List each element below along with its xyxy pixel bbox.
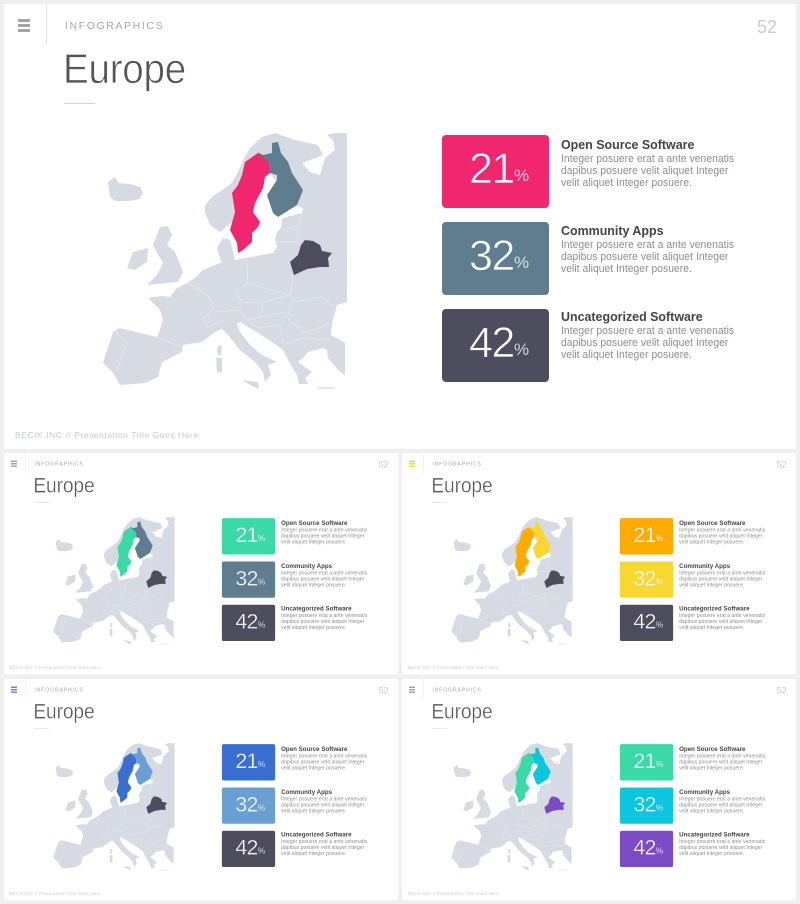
map of Europe — [53, 743, 175, 870]
stat box: 42%: 42 — [633, 836, 656, 860]
text: uncategorized software: velit aliquet Integer posuere. — [281, 625, 346, 631]
text: open source software — [679, 519, 765, 545]
text: community apps: Integer posuere erat a ante venenatis — [679, 570, 765, 576]
text: community apps: dapibus posuere velit aliquet Integer — [561, 251, 728, 263]
text: open source software: dapibus posuere velit aliquet Integer — [679, 533, 762, 539]
text: uncategorized software: Integer posuere erat a ante venenatis — [679, 613, 765, 619]
text: community apps — [281, 788, 367, 814]
stat box: 32% — [620, 787, 673, 824]
stat box: 32%: 32 — [235, 792, 258, 816]
stat box: 32%: 32 — [633, 792, 656, 816]
panel: blue variant: 52 — [379, 685, 389, 695]
text: community apps: Integer posuere erat a ante venenatis — [281, 796, 367, 802]
map of Europe — [451, 743, 573, 870]
text: open source software: Open Source Software — [281, 745, 347, 753]
stat box: 32%: % — [258, 577, 265, 586]
map of Europe — [53, 517, 175, 644]
text: open source software: Integer posuere erat a ante venenatis — [281, 527, 367, 533]
text: uncategorized software — [679, 605, 765, 631]
text: uncategorized software: Uncategorized Software — [679, 605, 750, 612]
stat box: 32% — [442, 222, 549, 295]
panel: green variant — [4, 453, 398, 674]
stat box: 32% — [620, 561, 673, 598]
text: open source software: Integer posuere erat a ante venenatis — [679, 527, 765, 533]
stat box: 42%: % — [258, 620, 265, 630]
stat box: 32%: 32 — [633, 566, 656, 590]
stat box: 32% — [222, 787, 275, 824]
map of Europe — [103, 133, 347, 389]
stat box: 21% — [620, 744, 673, 780]
stat box: 32%: % — [656, 803, 663, 812]
text: open source software: dapibus posuere velit aliquet Integer — [281, 533, 364, 539]
stat box: 42% — [442, 309, 549, 382]
text: community apps: Integer posuere erat a ante venenatis — [561, 239, 734, 251]
text: open source software: dapibus posuere velit aliquet Integer — [281, 759, 364, 765]
text: open source software: velit aliquet Integer posuere. — [679, 765, 744, 771]
stat box: 42%: 42 — [469, 319, 514, 367]
text: open source software: dapibus posuere velit aliquet Integer — [679, 759, 762, 765]
panel: green, cyan and purple variant: INFOGRAPHICS — [432, 687, 482, 693]
text: open source software — [561, 137, 734, 189]
icon: menu — [409, 460, 415, 467]
title: Europe — [431, 699, 493, 723]
stat box: 42%: % — [258, 846, 265, 856]
panel: green variant: 52 — [379, 459, 389, 469]
stat box: 42% — [620, 605, 673, 641]
text: community apps: velit aliquet Integer posuere. — [281, 582, 346, 588]
text: community apps: dapibus posuere velit aliquet Integer — [281, 802, 364, 808]
text: community apps — [281, 562, 367, 588]
stat box: 42% — [222, 831, 275, 867]
title: Europe — [33, 473, 95, 497]
footer: BECIK.INC // Presentation Title Goes Here — [9, 665, 101, 670]
text: uncategorized software: dapibus posuere velit aliquet Integer — [679, 619, 762, 625]
text: community apps — [679, 562, 765, 588]
text: open source software: velit aliquet Integer posuere. — [679, 539, 744, 545]
stat box: 32%: % — [258, 803, 265, 812]
text: uncategorized software: Uncategorized Software — [281, 605, 352, 612]
stat box: 32%: 32 — [235, 566, 258, 590]
stat box: 32%: 32 — [469, 232, 514, 280]
text: community apps: dapibus posuere velit aliquet Integer — [679, 576, 762, 582]
text: uncategorized software: velit aliquet Integer posuere. — [281, 851, 346, 857]
text: open source software: Integer posuere erat a ante venenatis — [281, 753, 367, 759]
text: community apps: velit aliquet Integer posuere. — [679, 808, 744, 814]
text: uncategorized software — [679, 831, 765, 857]
stat box: 42% — [620, 831, 673, 867]
stat box: 32% — [222, 561, 275, 598]
stat box: 21%: % — [258, 760, 265, 769]
text: open source software: velit aliquet Integer posuere. — [281, 539, 346, 545]
stat box: 42% — [222, 605, 275, 641]
title: Europe — [431, 473, 493, 497]
stat box: 21% — [620, 518, 673, 554]
text: uncategorized software: Integer posuere erat a ante venenatis — [679, 839, 765, 845]
text: uncategorized software: Uncategorized Software — [561, 309, 703, 324]
text: open source software: velit aliquet Integer posuere. — [281, 765, 346, 771]
panel: blue variant — [4, 679, 398, 900]
stat box: 21% — [442, 135, 549, 208]
title: Europe — [33, 699, 95, 723]
text: community apps: Community Apps — [281, 788, 332, 795]
footer: BECIK.INC // Presentation Title Goes Here — [9, 891, 101, 896]
text: community apps — [679, 788, 765, 814]
text: uncategorized software: velit aliquet Integer posuere. — [679, 851, 744, 857]
stat box: 32%: % — [514, 253, 529, 272]
text: open source software: velit aliquet Integer posuere. — [561, 177, 692, 189]
text: uncategorized software: dapibus posuere velit aliquet Integer — [561, 337, 728, 349]
text: uncategorized software: velit aliquet Integer posuere. — [561, 349, 692, 361]
text: uncategorized software — [281, 605, 367, 631]
text: open source software — [281, 745, 367, 771]
text: community apps: Community Apps — [281, 562, 332, 569]
text: open source software: Open Source Software — [561, 137, 694, 152]
icon: menu — [11, 686, 17, 693]
text: community apps: Integer posuere erat a ante venenatis — [679, 796, 765, 802]
page number: 52 — [757, 17, 777, 37]
text: uncategorized software — [281, 831, 367, 857]
text: community apps: Community Apps — [561, 223, 663, 238]
text: community apps: velit aliquet Integer posuere. — [281, 808, 346, 814]
map of Europe — [451, 517, 573, 644]
text: open source software: dapibus posuere velit aliquet Integer — [561, 165, 728, 177]
text: uncategorized software — [561, 309, 734, 361]
panel: green, cyan and purple variant — [402, 679, 796, 900]
footer: BECIK.INC // Presentation Title Goes Here — [15, 430, 199, 440]
text: uncategorized software: dapibus posuere velit aliquet Integer — [281, 619, 364, 625]
stat box: 42%: 42 — [235, 610, 258, 634]
text: open source software: Integer posuere erat a ante venenatis — [679, 753, 765, 759]
text: community apps: velit aliquet Integer posuere. — [679, 582, 744, 588]
stat box: 42%: 42 — [235, 836, 258, 860]
stat box: 21% — [222, 744, 275, 780]
panel: orange variant: INFOGRAPHICS — [432, 461, 482, 467]
text: community apps: Community Apps — [679, 788, 730, 795]
stat box: 42%: % — [656, 846, 663, 856]
text: community apps: dapibus posuere velit aliquet Integer — [281, 576, 364, 582]
footer: BECIK.INC // Presentation Title Goes Here — [407, 891, 499, 896]
stat box: 21%: 21 — [469, 145, 514, 193]
text: uncategorized software: Uncategorized Software — [281, 831, 352, 838]
text: uncategorized software: Integer posuere erat a ante venenatis — [561, 325, 734, 337]
stat box: 42%: % — [514, 340, 529, 359]
icon: menu — [18, 19, 30, 32]
text: open source software: Open Source Software — [281, 519, 347, 527]
stat box: 42%: 42 — [633, 610, 656, 634]
stat box: 21% — [222, 518, 275, 554]
text: uncategorized software: velit aliquet Integer posuere. — [679, 625, 744, 631]
text: uncategorized software: dapibus posuere velit aliquet Integer — [281, 845, 364, 851]
panel: green, cyan and purple variant: 52 — [777, 685, 787, 695]
panel: orange variant: 52 — [777, 459, 787, 469]
panel: orange variant — [402, 453, 796, 674]
text: open source software — [281, 519, 367, 545]
stat box: 21%: % — [656, 760, 663, 769]
stat box: 21%: 21 — [633, 523, 656, 547]
panel: blue variant: INFOGRAPHICS — [34, 687, 84, 693]
stat box: 21%: 21 — [235, 749, 258, 773]
text: open source software: Open Source Software — [679, 519, 745, 527]
text: uncategorized software: Integer posuere erat a ante venenatis — [281, 839, 367, 845]
stat box: 21%: 21 — [235, 523, 258, 547]
title: Europe — [63, 45, 186, 92]
footer: BECIK.INC // Presentation Title Goes Here — [407, 665, 499, 670]
text: open source software: Open Source Software — [679, 745, 745, 753]
text: uncategorized software: Uncategorized Software — [679, 831, 750, 838]
text: open source software — [679, 745, 765, 771]
stat box: 21%: % — [258, 534, 265, 543]
text: uncategorized software: Integer posuere erat a ante venenatis — [281, 613, 367, 619]
text: open source software: Integer posuere erat a ante venenatis — [561, 153, 734, 165]
text: community apps: dapibus posuere velit aliquet Integer — [679, 802, 762, 808]
text: community apps: velit aliquet Integer posuere. — [561, 263, 692, 275]
panel: main slide (pink) — [4, 4, 796, 449]
text: community apps — [561, 223, 734, 275]
text: uncategorized software: dapibus posuere velit aliquet Integer — [679, 845, 762, 851]
panel: green variant: INFOGRAPHICS — [34, 461, 84, 467]
stat box: 42%: % — [656, 620, 663, 630]
text: community apps: Integer posuere erat a ante venenatis — [281, 570, 367, 576]
stat box: 21%: % — [656, 534, 663, 543]
stat box: 21%: 21 — [633, 749, 656, 773]
stat box: 32%: % — [656, 577, 663, 586]
text: community apps: Community Apps — [679, 562, 730, 569]
kicker: infographics: INFOGRAPHICS — [65, 20, 164, 32]
stat box: 21%: % — [514, 166, 529, 185]
